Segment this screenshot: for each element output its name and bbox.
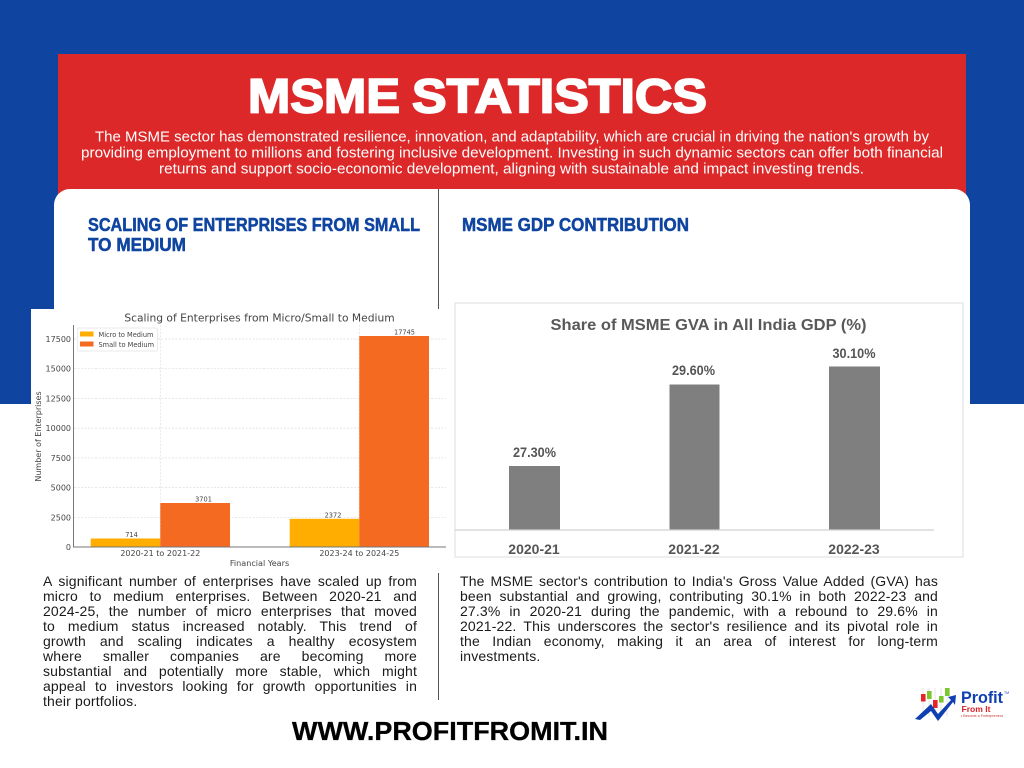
value labels bbox=[125, 328, 415, 539]
intro paragraph: providing employment to millions and fostering inclusive development. Investing in such dynamic sectors can offer both financial bbox=[81, 146, 943, 162]
title: MSME bbox=[248, 70, 400, 124]
bar chart: scaling of enterprises bbox=[31, 309, 446, 568]
divider bbox=[438, 189, 439, 309]
value labels: 27.30% bbox=[513, 444, 556, 460]
intro paragraph: returns and support socio-economic development, aligning with sustainable and impact investing trends. bbox=[159, 162, 864, 178]
chart title: Scaling of Enterprises from Micro/Small to Medium bbox=[124, 312, 395, 324]
value labels: 29.60% bbox=[672, 362, 715, 378]
website footer: WWW.PROFITFROMIT.IN bbox=[292, 718, 608, 746]
heading: scaling of enterprises: SCALING OF ENTERPRISES FROM SMALL bbox=[88, 215, 420, 235]
header text bbox=[81, 70, 943, 178]
icon: Profit From It logo: TM bbox=[1004, 691, 1009, 695]
title: STATISTICS bbox=[412, 70, 707, 124]
y axis ticks: 15000 bbox=[46, 365, 71, 374]
axes bbox=[74, 325, 446, 547]
value labels: 17745 bbox=[394, 328, 415, 336]
title bbox=[248, 70, 707, 124]
bar chart: share of MSME GVA bbox=[454, 302, 964, 558]
x axis labels: Financial Years bbox=[230, 558, 289, 568]
icon: Profit From It logo: From It bbox=[962, 704, 991, 714]
y axis ticks bbox=[46, 335, 71, 552]
divider bbox=[438, 573, 439, 700]
icon: Profit From It logo: Profit bbox=[961, 688, 1003, 707]
legend: Small to Medium bbox=[98, 341, 154, 349]
section headings bbox=[88, 215, 689, 255]
intro paragraph bbox=[81, 130, 943, 178]
heading: GDP contribution: MSME GDP CONTRIBUTION bbox=[462, 215, 689, 235]
heading: scaling of enterprises: TO MEDIUM bbox=[88, 235, 186, 255]
value labels bbox=[513, 345, 876, 460]
legend: Micro to Medium bbox=[98, 331, 153, 339]
axis line bbox=[455, 529, 934, 531]
y axis ticks: 12500 bbox=[46, 394, 71, 403]
x axis labels bbox=[120, 549, 399, 568]
x axis labels: 2023-24 to 2024-25 bbox=[319, 549, 399, 558]
legend bbox=[78, 328, 158, 351]
x axis labels: 2020-21 to 2021-22 bbox=[120, 549, 200, 558]
y axis ticks: 7500 bbox=[51, 454, 71, 463]
category labels bbox=[508, 541, 880, 557]
white content panel bbox=[54, 189, 970, 404]
value labels: 2372 bbox=[325, 512, 341, 520]
y axis ticks: 5000 bbox=[51, 484, 71, 493]
category labels: 2020-21 bbox=[508, 541, 560, 557]
icon: Profit From It logo: • Become a Fortrepreneur bbox=[961, 714, 1004, 718]
red header panel bbox=[58, 54, 966, 204]
value labels: 30.10% bbox=[832, 345, 876, 361]
text block: GDP contribution bbox=[460, 574, 938, 664]
heading: scaling of enterprises bbox=[88, 215, 420, 255]
value labels: 714 bbox=[125, 531, 138, 539]
bars bbox=[509, 366, 880, 530]
blue background band bbox=[0, 0, 1024, 404]
y axis ticks: 17500 bbox=[46, 335, 71, 344]
text block: enterprises scaling bbox=[43, 574, 417, 709]
y axis ticks: 2500 bbox=[51, 513, 71, 522]
y axis title: Number of Enterprises bbox=[34, 391, 43, 482]
value labels: 3701 bbox=[195, 496, 212, 504]
y axis ticks: 0 bbox=[66, 543, 71, 552]
intro paragraph: The MSME sector has demonstrated resilience, innovation, and adaptability, which are crucial in driving the nation's growth by bbox=[95, 130, 930, 146]
category labels: 2021-22 bbox=[668, 541, 720, 557]
bars bbox=[91, 336, 429, 547]
category labels: 2022-23 bbox=[828, 541, 880, 557]
chart title: Share of MSME GVA in All India GDP (%) bbox=[550, 317, 866, 334]
icon: Profit From It logo bbox=[915, 688, 1009, 721]
y axis ticks: 10000 bbox=[46, 424, 71, 433]
